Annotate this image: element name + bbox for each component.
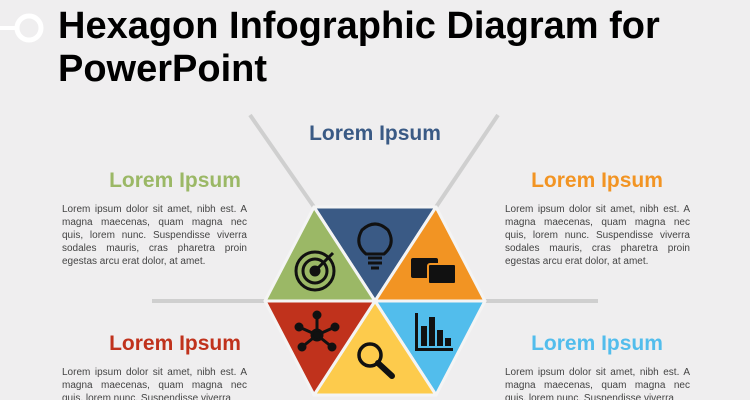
text: orange: Lorem ipsum dolor sit amet, nibh est. A (505, 204, 690, 215)
text: orange: sodales mauris, cras pharetra proin (505, 243, 690, 254)
text: blue: magna maecenas, quam magna nec (505, 380, 690, 391)
text: red (62, 367, 247, 400)
text: blue (505, 367, 690, 400)
text: green: magna maecenas, quam magna nec (62, 217, 247, 228)
text: green: egestas arcu erat dolor, at amet. (62, 256, 205, 267)
text: green: sodales mauris, cras pharetra proin (62, 243, 247, 254)
icon: network (296, 312, 338, 350)
icon: target (296, 252, 334, 290)
text: green: Lorem ipsum dolor sit amet, nibh est. A (62, 204, 247, 215)
text: orange: magna maecenas, quam magna nec (505, 217, 690, 228)
heading: green: Lorem Ipsum (109, 169, 241, 192)
title (58, 5, 660, 90)
heading: blue: Lorem Ipsum (531, 332, 663, 355)
title: PowerPoint (58, 48, 267, 90)
text: green (62, 204, 247, 267)
heading: red: Lorem Ipsum (109, 332, 241, 355)
icon: chat (411, 258, 456, 284)
heading: orange: Lorem Ipsum (531, 169, 663, 192)
title: Hexagon Infographic Diagram for (58, 5, 660, 47)
text: orange (505, 204, 690, 267)
icon: title pin (0, 14, 44, 42)
text: red: magna maecenas, quam magna nec (62, 380, 247, 391)
heading: top: Lorem Ipsum (309, 122, 441, 145)
text: orange: quis, lorem nunc. Suspendisse viverra (505, 230, 690, 241)
icon: bulb (359, 224, 391, 268)
text: green: quis, lorem nunc. Suspendisse viverra (62, 230, 247, 241)
text: orange: egestas arcu erat dolor, at amet. (505, 256, 648, 267)
text: blue: Lorem ipsum dolor sit amet, nibh est. A (505, 367, 690, 378)
icon: bar chart (415, 313, 453, 351)
text: red: Lorem ipsum dolor sit amet, nibh est. A (62, 367, 247, 378)
icon: magnifier (359, 344, 392, 376)
